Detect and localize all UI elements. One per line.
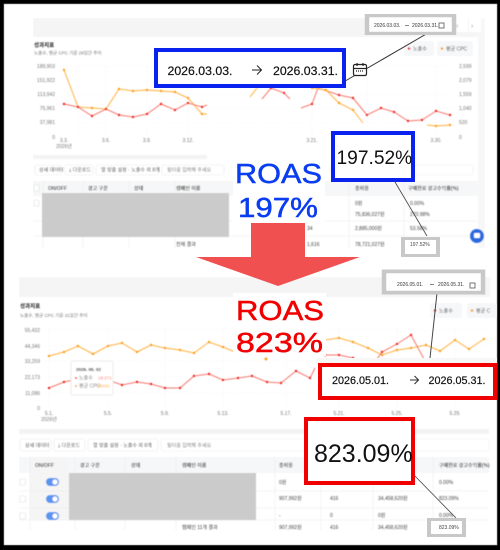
- table: May campaign results: ON/OFF: [35, 463, 54, 469]
- text: May chart subtitle: 노출수, 평균 CPC 기준 31일간 추이: [20, 312, 88, 319]
- heading: May ROAS 823%: 823%: [236, 327, 323, 358]
- chart: March impressions and CPC: 2026년: [56, 143, 72, 150]
- chart: May impressions and CPC: 22,173: [25, 375, 40, 381]
- chart: March impressions and CPC: 3.3.: [60, 138, 68, 144]
- table: May campaign results: 416: [330, 496, 339, 502]
- chart: May impressions and CPC: 5.29.: [449, 411, 461, 417]
- chart: March impressions and CPC: 189,903: [37, 64, 55, 70]
- arrow: improvement from March to May: [196, 223, 360, 286]
- callout: March date range source: [367, 15, 454, 34]
- table: March campaign results: 270.98%: [410, 212, 430, 218]
- callout: May ROAS source: 823.09%: [439, 525, 459, 531]
- callout: May ROAS source: [429, 519, 464, 536]
- chart: March impressions and CPC: [37, 64, 472, 150]
- tooltip: May 2 values: 노출수: [79, 374, 93, 382]
- heading: March performance metrics: 성과지표: [34, 41, 54, 49]
- table: May campaign results: 907,992원: [279, 524, 302, 531]
- chart: May impressions and CPC: 2026년: [41, 416, 57, 423]
- callout: March ROAS source: [403, 238, 438, 256]
- chart: March impressions and CPC: 113,942: [37, 92, 55, 98]
- table: May campaign results: 광고 구분: [80, 462, 100, 469]
- chart: May impressions and CPC: 5.21.: [333, 411, 345, 417]
- chart: May impressions and CPC: 11,086: [25, 391, 40, 397]
- table toolbar: March: [35, 165, 473, 175]
- callout: March ROAS big text background: [233, 160, 325, 222]
- table: March campaign results: 53.58%: [410, 226, 428, 232]
- redacted block: March campaign names: [42, 193, 229, 237]
- callout: March ROAS enlarged: [333, 133, 413, 180]
- legend: March metric selectors: 평균 CPC: [446, 46, 468, 52]
- tooltip: May 2 values: 2026. 05. 02: [76, 367, 102, 372]
- callout: March date range enlarged: 2026.03.31.: [273, 64, 338, 78]
- chart: May impressions and CPC: 5.13.: [217, 411, 229, 417]
- table: March campaign results: 1,616: [307, 242, 320, 248]
- table: March campaign results: 상태: [134, 185, 144, 192]
- leader line: March ROAS: [395, 182, 427, 236]
- callout: May ROAS big text background: [233, 293, 326, 356]
- table: March campaign results: 구매완료 광고수익률(%): [408, 185, 459, 192]
- nav buttons: March date pager: [456, 18, 481, 32]
- table: May campaign results: 0원: [279, 479, 287, 486]
- table: May campaign results: 34,458,620원: [378, 495, 408, 502]
- chart: March impressions and CPC: 37,981: [40, 120, 55, 126]
- legend: May metric selectors: [430, 303, 497, 318]
- chart: March impressions and CPC: 3.21.: [306, 138, 318, 144]
- table: March campaign results: 총비용: [355, 185, 369, 192]
- heading: May performance metrics: 성과지표: [20, 302, 40, 310]
- tooltip: May 2 values: 18,071: [98, 376, 112, 380]
- tooltip: May 2 values: [71, 361, 113, 395]
- leader line: March date: [340, 33, 428, 84]
- redacted block: May campaign names: [69, 473, 256, 520]
- chart: May impressions and CPC: 5.17.: [280, 411, 292, 417]
- table: March campaign results: ON/OFF: [48, 186, 67, 192]
- chart: March impressions and CPC: 3.12.: [182, 138, 194, 144]
- callout: May date range source: 2026.05.01.: [397, 282, 423, 288]
- callout: May ROAS enlarged: 823.09%: [314, 440, 413, 468]
- panel: May dashboard screenshot: [19, 277, 497, 531]
- table: March campaign results: 전체 결과: [176, 241, 196, 248]
- table: March campaign results: 광고 구분: [88, 185, 108, 192]
- text: March chart subtitle: 노출수, 평균 CPC 기준 29일간 추이: [34, 50, 102, 56]
- callout: May date range enlarged: 2026.05.01.: [332, 375, 389, 387]
- chart: May impressions and CPC: 33,259: [25, 359, 40, 365]
- arrow: date range separator: [410, 376, 418, 384]
- table: May campaign results: 823.09%: [439, 496, 459, 502]
- chart: March impressions and CPC: 2,599: [459, 64, 472, 70]
- table: May campaign results: 캠페인 11개 결과: [182, 524, 218, 531]
- chart: March impressions and CPC: 0: [52, 135, 55, 141]
- table toolbar: March: ⤓ 다운로드: [69, 166, 91, 174]
- table: May campaign results: [19, 457, 490, 531]
- legend: March metric selectors: [404, 41, 473, 56]
- table: May campaign results: 907,992원: [279, 495, 302, 502]
- callout: March date range enlarged: [156, 50, 344, 86]
- callout: March date range source: 2026.03.31.: [412, 23, 438, 29]
- tooltip: May 2 values: ₩442: [98, 384, 110, 388]
- callout: May date range enlarged: [316, 358, 497, 398]
- table: May campaign results: 구매완료 광고수익률(%): [439, 462, 490, 469]
- table: May campaign results: 0원: [378, 512, 386, 519]
- table: March campaign results: 75,836,027원: [355, 211, 385, 218]
- chart: March impressions and CPC: 520: [459, 120, 468, 126]
- chart: March impressions and CPC: 1,040: [459, 106, 472, 112]
- chart: March impressions and CPC: 0: [459, 135, 462, 141]
- table: May campaign results: 총비용: [279, 462, 293, 469]
- table: March campaign results: 34: [307, 226, 313, 232]
- table: March campaign results: 2,885,000원: [355, 225, 382, 232]
- heading: May ROAS 823%: ROAS: [236, 295, 324, 326]
- chart: March impressions and CPC: 3.9.: [143, 138, 151, 144]
- callout: March date range enlarged: 2026.03.03.: [168, 64, 232, 78]
- chart: March impressions and CPC: 151,922: [37, 78, 55, 84]
- panel: March dashboard screenshot: [33, 18, 485, 248]
- chart: May impressions and CPC: 44,346: [25, 344, 40, 350]
- chart: May impressions and CPC: 5.5.: [104, 411, 112, 417]
- table: May campaign results: 0.00%: [439, 513, 454, 519]
- callout: March ROAS source: 197.52%: [410, 242, 430, 248]
- heading: March ROAS 197%: [235, 158, 322, 223]
- floating button: camera: [470, 229, 484, 243]
- table toolbar: May: ⤓ 다운로드: [58, 442, 80, 449]
- chart: May impressions and CPC: 5.1.: [45, 411, 53, 417]
- table toolbar: May: 열 맞춤 설정 · 노출수 외 8개: [93, 442, 152, 449]
- table toolbar: May: [20, 439, 489, 451]
- callout: March date range source: 2026.03.03.: [374, 23, 400, 29]
- table: May campaign results: 0.00%: [439, 480, 454, 486]
- leader line: May ROAS: [412, 473, 456, 518]
- nav buttons: March date pager: ›: [471, 23, 474, 30]
- table: May campaign results: -: [279, 513, 281, 519]
- chart: May impressions and CPC: 5.9.: [161, 411, 169, 417]
- chart: May impressions and CPC: 0: [37, 406, 40, 412]
- heading: March ROAS 197%: ROAS: [235, 158, 322, 189]
- nav buttons: March date pager: ‹: [456, 23, 459, 30]
- heading: March ROAS 197%: 197%: [238, 192, 318, 223]
- chart: March impressions and CPC: 1,559: [459, 92, 472, 98]
- table toolbar: May: 필터를 입력해 주세요: [167, 442, 212, 449]
- table: May campaign results: 0: [330, 513, 333, 519]
- icon: calendar: [354, 63, 366, 76]
- table: March campaign results: 197.52%: [410, 242, 430, 248]
- leader line: May date: [430, 293, 437, 358]
- callout: May date range source: [384, 271, 483, 293]
- legend: March metric selectors: 노출수: [413, 46, 427, 52]
- callout: May date range enlarged: 2026.05.31.: [428, 375, 486, 387]
- chart: March impressions and CPC: 3.6.: [102, 138, 110, 144]
- table: March campaign results: 78,721,027원: [355, 241, 385, 248]
- toggles: campaign on/off: [46, 478, 59, 520]
- table: March campaign results: [33, 181, 478, 248]
- arrow: date range separator: [252, 66, 262, 74]
- table: March campaign results: 캠페인 이름: [176, 185, 201, 192]
- legend: May metric selectors: 노출수: [439, 308, 453, 314]
- table toolbar: May: 상세 데이터: [25, 442, 49, 449]
- legend: May metric selectors: 평균 C: [476, 308, 491, 314]
- table: March campaign results: 0.00%: [410, 201, 425, 207]
- callout: March ROAS enlarged: 197.52%: [336, 148, 412, 169]
- chart: May impressions and CPC: 5.25.: [391, 411, 403, 417]
- table: May campaign results: 상태: [131, 462, 141, 469]
- table: May campaign results: 34,458,620원: [378, 524, 408, 531]
- table: May campaign results: 416: [330, 525, 339, 531]
- chart: March impressions and CPC: 75,961: [40, 106, 55, 112]
- tooltip: May 2 values: 평균 CPC: [79, 382, 101, 390]
- table: March campaign results: 0원: [355, 200, 363, 207]
- table toolbar: March: 필터를 입력해 주세요: [167, 166, 212, 174]
- table toolbar: March: 상세 데이터: [39, 166, 63, 174]
- chart: May impressions and CPC: 55,432: [25, 328, 40, 334]
- table: May campaign results: 캠페인 이름: [182, 462, 207, 469]
- chart: May impressions and CPC: [25, 328, 490, 423]
- chart: March impressions and CPC: 3.30.: [430, 138, 442, 144]
- callout: May date range source: 2026.05.31.: [438, 282, 464, 288]
- heading: May ROAS 823%: [236, 295, 324, 358]
- chart: March impressions and CPC: 2,079: [459, 78, 472, 84]
- table toolbar: March: 열 맞춤 설정 · 노출수 외 8개: [101, 166, 160, 174]
- callout: May ROAS enlarged: [306, 419, 413, 483]
